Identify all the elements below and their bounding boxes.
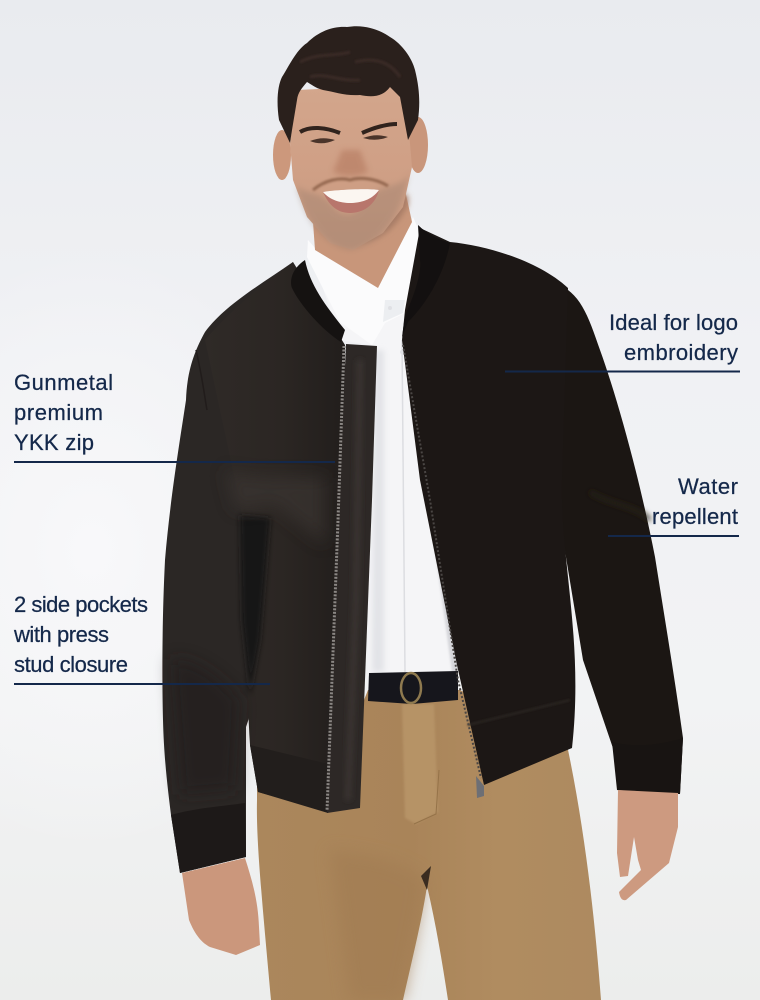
right sleeve: [540, 283, 683, 794]
jacket right panel: [402, 228, 575, 785]
left hem band: [250, 745, 332, 813]
callout: gunmetal zip: Gunmetal: [14, 370, 113, 395]
ribbed collar: [291, 225, 450, 342]
jacket left panel: [205, 262, 345, 812]
zip pull: [476, 776, 484, 798]
callout: gunmetal zip: [14, 370, 335, 463]
collar: [307, 217, 422, 345]
trousers: [257, 690, 601, 1000]
white shirt: [307, 217, 458, 676]
right hand: [617, 790, 678, 900]
callout: side pockets: stud closure: [14, 652, 128, 677]
smile: [323, 189, 379, 213]
callout: water repellent: repellent: [652, 504, 738, 529]
callout: logo embroidery: Ideal for logo: [609, 310, 738, 335]
right cuff: [612, 738, 683, 794]
man wearing bomber jacket: [162, 26, 683, 1000]
belt: [368, 671, 458, 704]
callout: water repellent: Water: [678, 474, 738, 499]
sleeve shadow: [240, 515, 270, 695]
eyebrows: [300, 128, 340, 133]
callout: side pockets: with press: [13, 622, 109, 647]
nose: [333, 150, 368, 176]
callout: gunmetal zip: premium: [14, 400, 103, 425]
left sleeve: [162, 262, 300, 873]
callout: logo embroidery: embroidery: [624, 340, 738, 365]
gunmetal zipper: [327, 346, 344, 811]
callout: water repellent: [608, 474, 739, 537]
eyes: [310, 138, 335, 143]
callout: side pockets: 2 side pockets: [14, 592, 148, 617]
neck: [313, 190, 412, 288]
callout: gunmetal zip: YKK zip: [14, 430, 94, 455]
left cuff: [171, 803, 246, 873]
zip flap: [327, 344, 377, 813]
callout: side pockets: [13, 592, 270, 685]
hair: [278, 26, 419, 143]
callout: logo embroidery: [505, 310, 740, 372]
left hand: [182, 858, 260, 955]
face: [290, 85, 412, 250]
head: [273, 26, 428, 250]
ears: [273, 130, 291, 180]
